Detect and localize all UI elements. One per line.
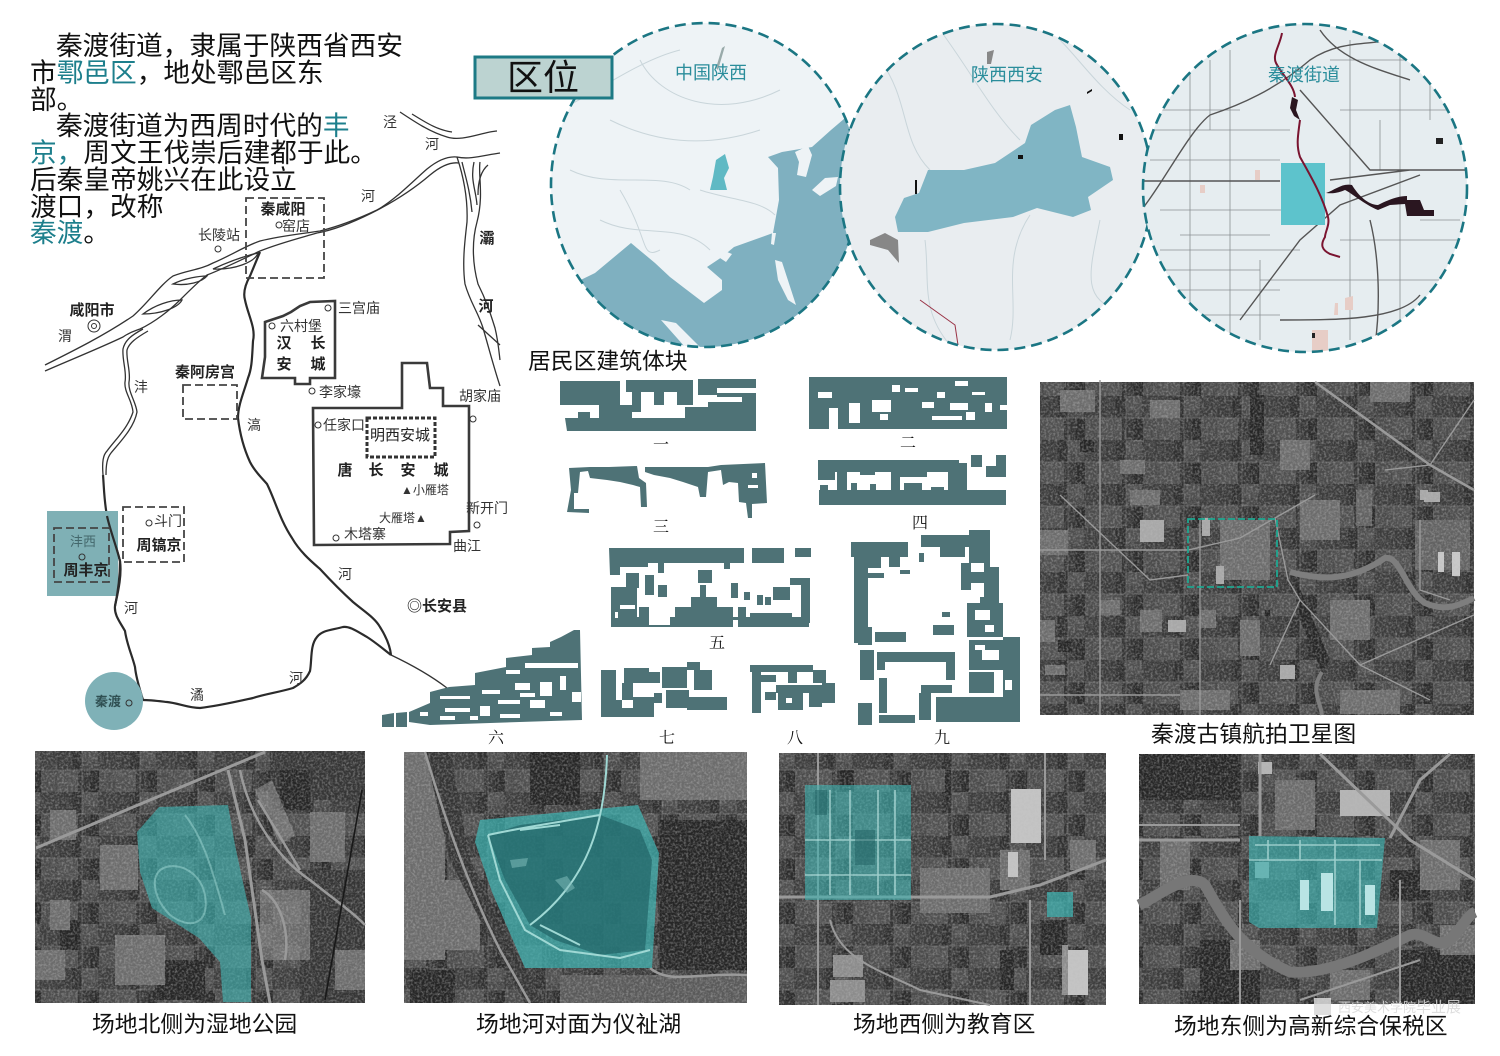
map: place labels: 潏 bbox=[190, 687, 204, 703]
building block group 一 bbox=[560, 379, 756, 431]
map: highlight Feng capital bbox=[47, 511, 118, 596]
map: place labels: 明西安城 bbox=[370, 427, 430, 444]
title box: 区位 bbox=[507, 57, 579, 98]
map: place labels bbox=[58, 114, 508, 709]
map: place labels: 渭 bbox=[58, 328, 72, 344]
map: place labels: 曲江 bbox=[453, 538, 481, 554]
map: place labels: 长 bbox=[368, 462, 384, 479]
map: place labels: 河 bbox=[124, 600, 138, 616]
label: 秦渡街道 bbox=[1268, 65, 1340, 85]
panel: historical map bbox=[45, 112, 508, 730]
map: place labels: 安 bbox=[276, 356, 292, 373]
building block group 三 bbox=[567, 463, 767, 518]
caption: north: 场地北侧为湿地公园 bbox=[92, 1011, 297, 1037]
map: place labels: 灞 bbox=[479, 230, 495, 247]
map: place labels: 新开门 bbox=[466, 500, 508, 516]
photo 1: north wetland park bbox=[35, 751, 365, 1003]
label: 中国陕西 bbox=[675, 63, 747, 83]
overlay: small campus bbox=[1047, 892, 1073, 917]
locator circle: China Shaanxi bbox=[545, 20, 870, 352]
map: place labels: 汉 bbox=[276, 335, 292, 352]
map: place labels: 周丰京 bbox=[63, 561, 109, 579]
overlay: wetland park area bbox=[137, 805, 251, 1002]
satellite image: aerial view bbox=[1040, 380, 1474, 715]
intro text bbox=[30, 31, 403, 248]
map: place labels: 三宫庙 bbox=[338, 300, 380, 316]
map: place labels: 沣 bbox=[134, 379, 148, 395]
map: place labels: 木塔寨 bbox=[344, 526, 386, 542]
intro text: 渡口，改称 bbox=[30, 192, 163, 222]
intro text: 秦渡。 bbox=[30, 218, 110, 248]
map: place labels: 李家壕 bbox=[319, 384, 361, 400]
map: place labels: ▲小雁塔 bbox=[401, 483, 449, 497]
locator circle: Shaanxi Xi'an bbox=[835, 20, 1155, 355]
map: city walls bbox=[54, 198, 469, 582]
block label 三: 三 bbox=[653, 518, 669, 536]
map: place labels: 斗门 bbox=[154, 513, 182, 529]
map: place labels: 泾 bbox=[383, 114, 397, 130]
block label 九: 九 bbox=[934, 729, 950, 747]
map: place labels: 城 bbox=[433, 461, 449, 479]
block label 一: 一 bbox=[653, 437, 669, 454]
map: place labels: 秦咸阳 bbox=[260, 200, 306, 218]
map: rivers bbox=[45, 112, 500, 708]
map: place labels: 秦阿房宫 bbox=[175, 363, 235, 381]
map: place labels: ◎长安县 bbox=[407, 598, 467, 615]
building block group 四 bbox=[818, 455, 1006, 505]
map: settlement dots bbox=[79, 222, 480, 706]
map: place labels: 河 bbox=[338, 566, 352, 582]
label: 陕西西安 bbox=[971, 65, 1043, 85]
caption: across the river: 场地河对面为仪祉湖 bbox=[476, 1011, 681, 1037]
map: place labels: 六村堡 bbox=[280, 318, 322, 334]
intro text: 秦渡街道，隶属于陕西省西安 bbox=[56, 31, 403, 61]
block label 二: 二 bbox=[900, 435, 916, 452]
block label 七: 七 bbox=[659, 729, 675, 747]
overlay: education campus bbox=[805, 785, 911, 900]
overlay: bonded zone bbox=[1249, 836, 1385, 928]
map: place labels: 长陵站 bbox=[198, 227, 240, 243]
map: place labels: 河 bbox=[361, 188, 375, 204]
map: river over highlight bbox=[107, 516, 120, 606]
map: place labels: 唐 bbox=[337, 461, 353, 479]
block label 六: 六 bbox=[488, 729, 505, 747]
building block group 五 bbox=[609, 548, 811, 627]
photo 2: ceremonial lake bbox=[404, 752, 747, 1003]
map: place labels: 城 bbox=[310, 355, 326, 373]
map: place labels: 河 bbox=[289, 670, 303, 686]
map: place labels: 沣西 bbox=[70, 534, 96, 549]
map: place labels: 长 bbox=[310, 335, 326, 352]
map: place labels: 安 bbox=[400, 462, 416, 479]
map: place labels: 滈 bbox=[247, 417, 261, 433]
map: highlight Qindu bbox=[85, 672, 143, 730]
intro text: 秦渡街道为西周时代的丰 bbox=[56, 111, 350, 141]
photo 4: bonded zone bbox=[1139, 754, 1475, 1004]
block label 四: 四 bbox=[912, 515, 928, 532]
locator circle: Qindu sub-district bbox=[1140, 20, 1470, 355]
building block group 六 bbox=[382, 630, 582, 727]
map: place labels: 大雁塔▲ bbox=[379, 511, 427, 525]
intro text: 京，周文王伐崇后建都于此。 bbox=[30, 138, 377, 168]
map: place labels: 周镐京 bbox=[136, 536, 182, 554]
heading: residential blocks: 居民区建筑体块 bbox=[528, 348, 688, 374]
caption: aerial view: 秦渡古镇航拍卫星图 bbox=[1151, 721, 1356, 747]
building block group 九 bbox=[851, 530, 1020, 725]
block label 八: 八 bbox=[787, 730, 803, 747]
watermark: 西安美术学院毕业展 bbox=[1338, 999, 1461, 1016]
caption: east: 场地东侧为高新综合保税区 bbox=[1174, 1013, 1448, 1039]
intro text: 市鄠邑区，地处鄠邑区东 bbox=[30, 58, 324, 88]
map: place labels: 河 bbox=[478, 298, 494, 315]
building block group 八 bbox=[750, 665, 835, 713]
building block group 七 bbox=[601, 662, 727, 717]
title box bbox=[475, 57, 612, 98]
map: place labels: 任家口 bbox=[323, 417, 365, 433]
map: place labels: 胡家庙 bbox=[459, 388, 501, 404]
building block group 二 bbox=[809, 377, 1007, 430]
study area dashed box bbox=[1188, 519, 1277, 587]
photo 3: education zone bbox=[779, 753, 1106, 1005]
block label 五: 五 bbox=[709, 634, 725, 652]
caption: west: 场地西侧为教育区 bbox=[853, 1011, 1035, 1037]
map: place labels: 秦渡 bbox=[95, 694, 121, 709]
intro text: 部。 bbox=[30, 85, 83, 115]
map: place labels: 河 bbox=[425, 136, 439, 152]
intro text: 后秦皇帝姚兴在此设立 bbox=[30, 165, 297, 195]
map: place labels: 咸阳市 bbox=[69, 301, 115, 319]
map: place labels: 窑店 bbox=[282, 218, 310, 234]
overlay: lake area bbox=[475, 805, 659, 968]
